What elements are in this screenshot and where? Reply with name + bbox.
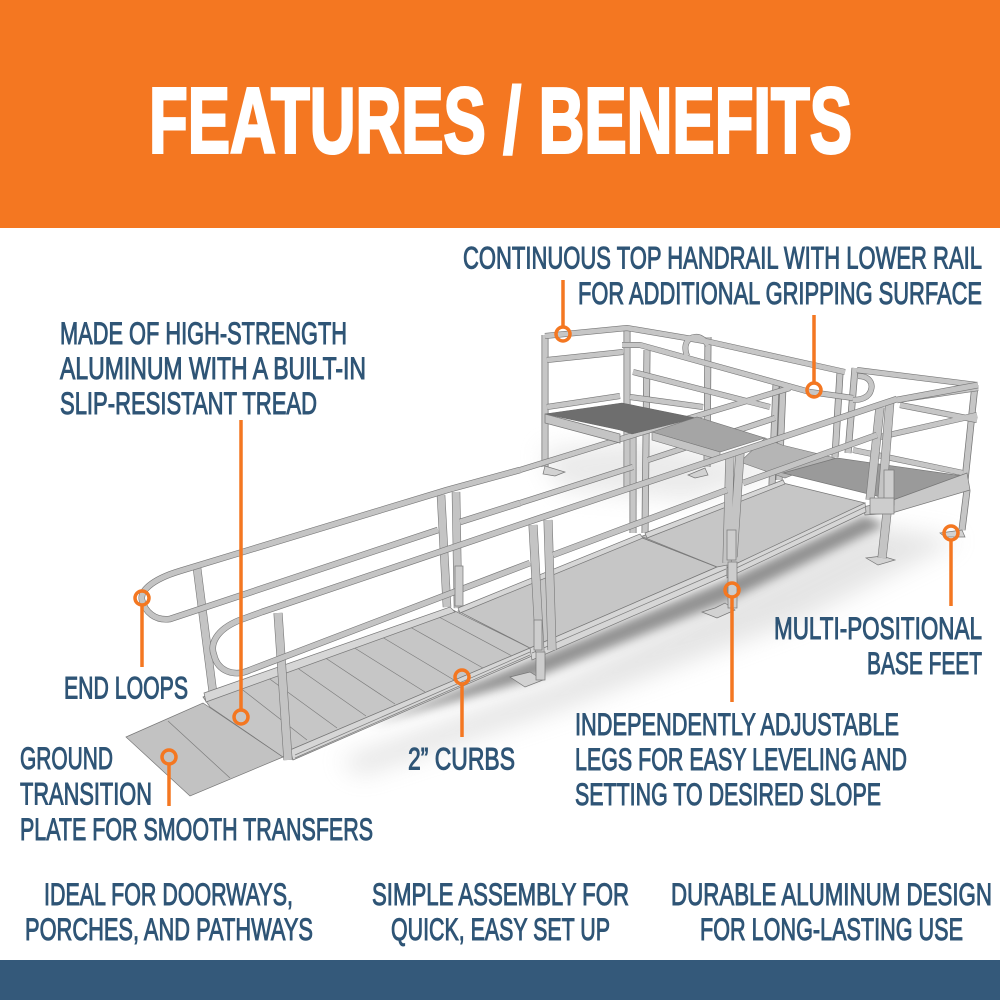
ramp illustration: [126, 328, 978, 796]
far handrail with end loop: [142, 470, 520, 693]
callout: base feet: [774, 526, 982, 681]
callout: ground transition plate: PLATE FOR SMOOTH TRANSFERS: [20, 811, 373, 847]
footer band: [0, 960, 1000, 1000]
callout: aluminum tread: ALUMINUM WITH A BUILT-IN: [60, 350, 366, 386]
adjustable legs: [455, 470, 894, 680]
callout: ground transition plate: [20, 740, 373, 847]
header banner: [0, 0, 1000, 228]
deck surface with planks: [126, 480, 866, 796]
benefit: doorways: PORCHES, AND PATHWAYS: [25, 911, 313, 947]
callout: ground transition plate: TRANSITION: [20, 776, 152, 812]
benefit: durable design: [671, 876, 992, 947]
floor shadows: [340, 440, 960, 775]
benefit: assembly: SIMPLE ASSEMBLY FOR: [372, 876, 629, 912]
upper platforms: [545, 403, 970, 515]
base feet: [510, 466, 965, 687]
benefit: doorways: IDEAL FOR DOORWAYS,: [44, 876, 293, 912]
callout: ground transition plate: GROUND: [20, 740, 113, 776]
near handrail with end loop: [213, 385, 978, 760]
callout: aluminum tread: [60, 315, 366, 724]
benefit: assembly: [372, 876, 629, 947]
callout: end loops: END LOOPS: [64, 670, 188, 706]
upper platform rear rails: [520, 328, 978, 533]
callout: curbs: 2” CURBS: [408, 740, 515, 776]
callout: curbs: [408, 670, 515, 776]
callout: adjustable legs: [575, 583, 907, 812]
benefit: assembly: QUICK, EASY SET UP: [391, 911, 610, 947]
callout: end loops: [64, 591, 188, 706]
callout: top handrail: [463, 240, 982, 397]
callout: aluminum tread: SLIP-RESISTANT TREAD: [60, 385, 317, 421]
callout: aluminum tread: MADE OF HIGH-STRENGTH: [60, 315, 347, 351]
benefit: doorways: [25, 876, 313, 947]
